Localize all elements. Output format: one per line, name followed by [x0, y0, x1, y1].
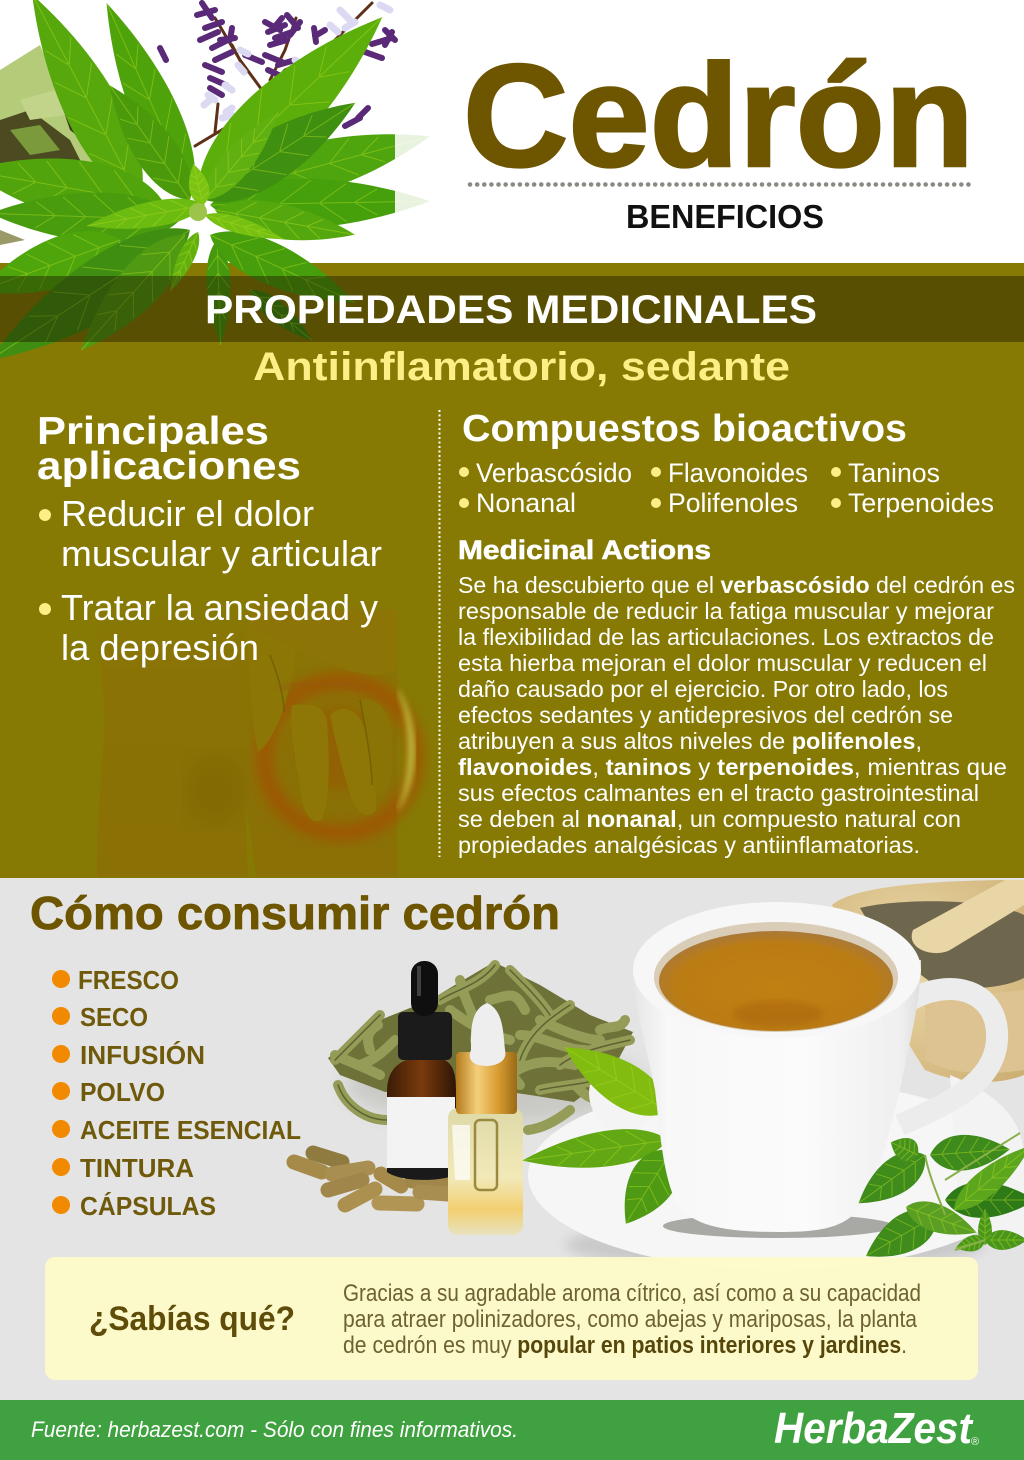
heading: main applications — [37, 410, 301, 488]
callout text — [343, 1280, 921, 1359]
image: dried leaves top left — [0, 45, 130, 245]
image: mortar and pestle — [832, 880, 1024, 1082]
application: reduce pain: Reducir el dolor — [61, 493, 314, 534]
logo: HerbaZest: HerbaZest — [774, 1404, 974, 1453]
panel: bioactive compounds — [459, 408, 994, 518]
list: consumption forms: FRESCO — [78, 965, 179, 995]
application: anxiety and depression — [39, 587, 378, 668]
image: lemon verbena leaves — [0, 0, 445, 386]
compound list: Terpenoides — [848, 488, 994, 518]
text block: medicinal actions: daño causado por el ejercicio. Por otro lado, los — [458, 676, 948, 702]
image: fresh verbena sprig — [848, 1132, 1024, 1272]
callout heading: ¿Sabías qué? — [89, 1300, 295, 1338]
registered mark: ® — [971, 1436, 979, 1448]
panel: how to consume background — [0, 878, 1024, 1400]
list: consumption forms: INFUSIÓN — [80, 1040, 205, 1070]
compound list: Flavonoides — [668, 458, 808, 488]
callout text: Gracias a su agradable aroma cítrico, así como a su capacidad — [343, 1280, 921, 1307]
application: anxiety and depression: la depresión — [61, 627, 259, 668]
heading: medicinal properties: PROPIEDADES MEDICINALES — [205, 288, 817, 332]
image: dried verbena leaves — [328, 962, 645, 1130]
text block: medicinal actions: responsable de reducir la fatiga muscular y mejorar — [458, 598, 994, 624]
application: reduce pain — [39, 493, 382, 574]
text block: medicinal actions: flavonoides, taninos y terpenoides, mientras que — [458, 754, 1007, 780]
source note: Fuente: herbazest.com - Sólo con fines informativos. — [31, 1417, 518, 1442]
image: white tea mug with tea — [633, 902, 921, 1232]
footer — [0, 1400, 1024, 1460]
compound list — [459, 458, 994, 518]
image: purple flowering branch — [160, 3, 395, 146]
image: mug handle — [900, 989, 997, 1125]
list: consumption forms: TINTURA — [80, 1153, 194, 1183]
application: anxiety and depression: Tratar la ansiedad y — [61, 587, 378, 628]
compound list: Taninos — [848, 458, 940, 488]
text block: medicinal actions: se deben al nonanal, un compuesto natural con — [458, 806, 961, 832]
text block: medicinal actions: esta hierba mejoran el dolor muscular y reducen el — [458, 650, 987, 676]
heading: main applications: Principales — [37, 410, 269, 453]
column divider — [438, 410, 440, 857]
text block: medicinal actions: propiedades analgésicas y antiinflamatorias. — [458, 832, 920, 858]
subtitle: BENEFICIOS — [626, 198, 824, 235]
compound list: Nonanal — [476, 488, 576, 518]
list: consumption forms: SECO — [80, 1002, 148, 1032]
image: dark dropper bottle — [387, 961, 456, 1180]
title: Cedrón — [463, 34, 974, 197]
panel: dark heading band — [0, 276, 1024, 342]
callout text: de cedrón es muy popular en patios interiores y jardines. — [343, 1332, 907, 1359]
list: consumption forms — [52, 965, 301, 1221]
list: consumption forms: CÁPSULAS — [80, 1191, 216, 1221]
text block: medicinal actions: la flexibilidad de las articulaciones. Los extractos de — [458, 624, 994, 650]
image: knee with pain highlight — [95, 600, 416, 877]
list: consumption forms: POLVO — [80, 1077, 165, 1107]
panel: main applications — [37, 410, 382, 668]
image: saucer — [528, 1075, 1024, 1270]
application: reduce pain: muscular y articular — [61, 533, 382, 574]
text block: medicinal actions: Se ha descubierto que el verbascósido del cedrón es — [458, 572, 1015, 598]
compound list: Verbascósido — [476, 458, 632, 488]
text block: medicinal actions — [458, 572, 1015, 858]
compound list: Polifenoles — [668, 488, 798, 518]
list: consumption forms: ACEITE ESENCIAL — [80, 1115, 301, 1145]
subheading: anti-inflammatory, sedative: Antiinflamatorio, sedante — [253, 345, 790, 389]
panel: medicinal properties background — [0, 263, 1024, 878]
callout text: para atraer polinizadores, como abejas y mariposas, la planta — [343, 1306, 918, 1333]
text block: medicinal actions: efectos sedantes y antidepresivos del cedrón se — [458, 702, 953, 728]
heading: medicinal actions: Medicinal Actions — [458, 535, 711, 565]
heading: how to consume: Cómo consumir cedrón — [30, 887, 560, 939]
image: clear oil bottle — [448, 1003, 523, 1235]
text block: medicinal actions: atribuyen a sus altos niveles de polifenoles, — [458, 728, 922, 754]
image: capsules — [294, 1153, 448, 1205]
heading: bioactive compounds: Compuestos bioactivos — [462, 408, 907, 450]
callout: did you know — [45, 1257, 978, 1380]
image: leaves on saucer — [520, 1029, 691, 1236]
text block: medicinal actions: sus efectos calmantes en el tracto gastrointestinal — [458, 780, 979, 806]
heading: main applications: aplicaciones — [37, 445, 301, 488]
title divider dots — [470, 182, 970, 187]
